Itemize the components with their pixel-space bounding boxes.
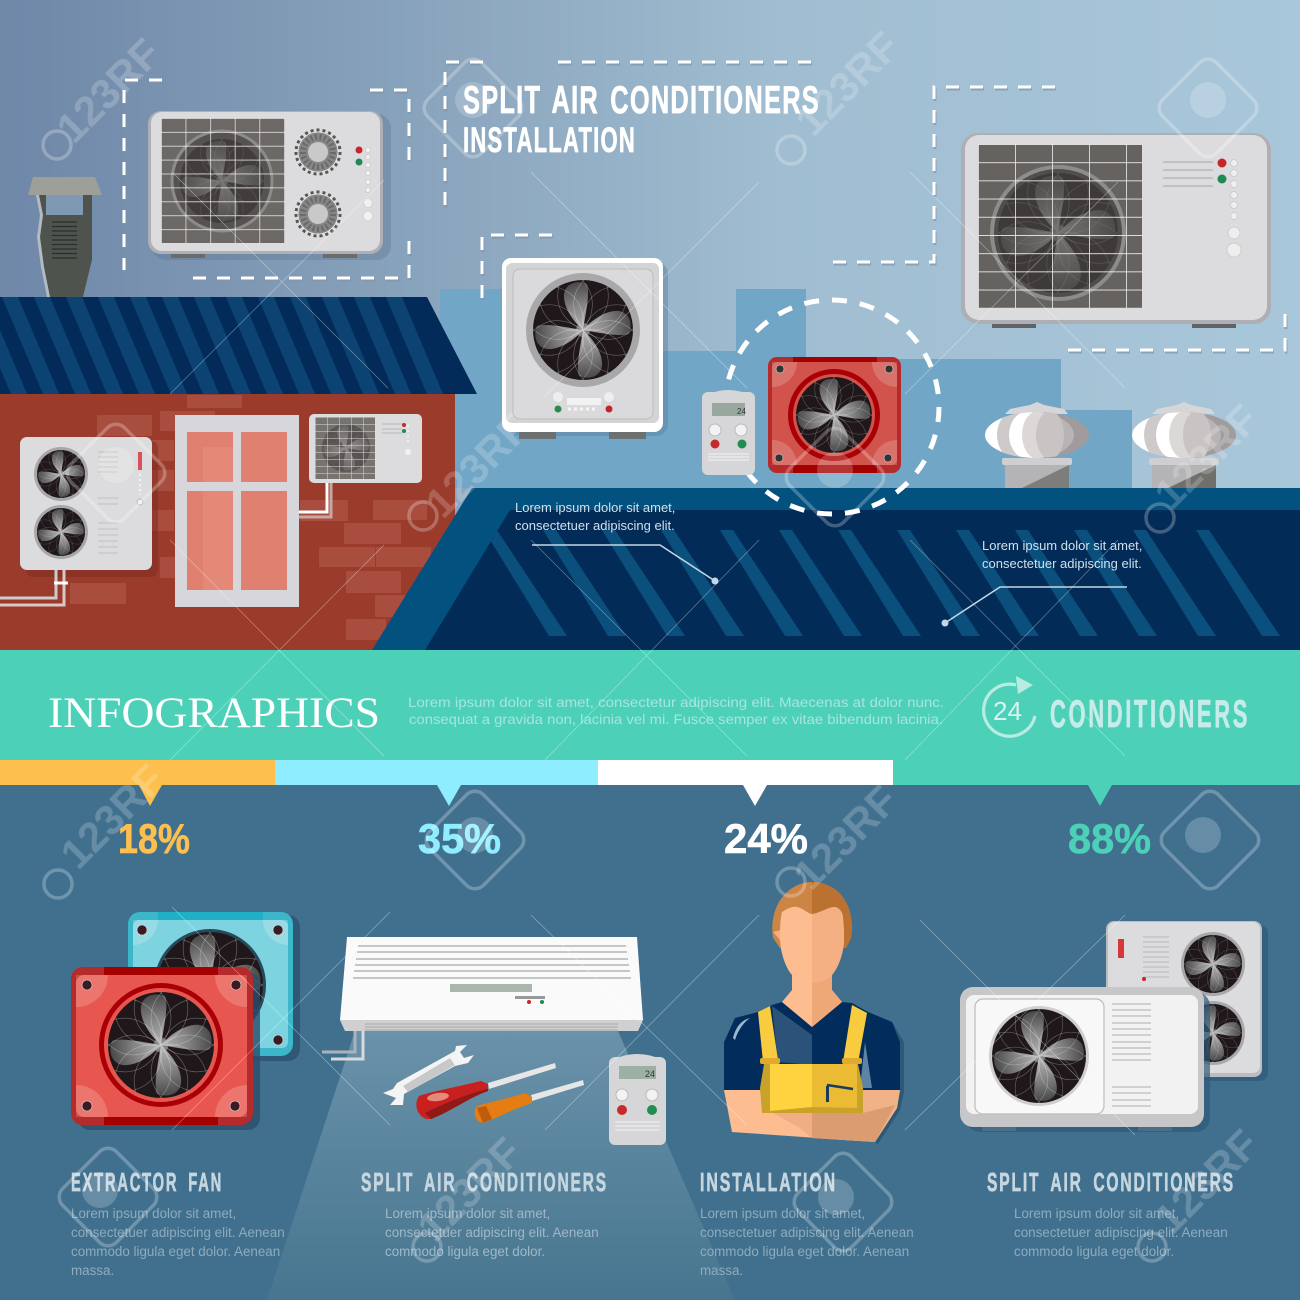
item text two: Lorem ipsum dolor sit amet, — [385, 1206, 550, 1221]
roof caption right — [942, 538, 1142, 626]
item text four: Lorem ipsum dolor sit amet, — [1014, 1206, 1179, 1221]
item text one: consectetuer adipiscing elit. Aenean — [71, 1225, 285, 1240]
light beam under air conditioner — [267, 1031, 735, 1300]
stock watermark overlay: 123RF — [51, 755, 174, 878]
stock watermark overlay: 123RF — [786, 22, 909, 145]
house wall with bricks — [0, 394, 455, 650]
extractor fan icons — [71, 912, 300, 1130]
item heading installation: INSTALLATION — [700, 1167, 837, 1197]
flat roof — [372, 488, 1300, 650]
house window — [175, 415, 331, 607]
title: INSTALLATION — [463, 121, 636, 160]
indoor split air conditioner — [322, 937, 643, 1059]
sky background — [0, 0, 1300, 650]
stock watermark overlay: 123RF — [416, 404, 539, 527]
infographics heading: INFOGRAPHICS — [48, 690, 380, 737]
percent 35: 35% — [418, 815, 501, 862]
remote control top: 24 — [737, 407, 746, 416]
item text three: consectetuer adipiscing elit. Aenean — [700, 1225, 914, 1240]
outdoor unit centre — [502, 258, 668, 439]
item text three: commodo ligula eget dolor. Aenean — [700, 1244, 909, 1259]
icon: 24 hour arrow: 24 — [993, 696, 1022, 726]
item text two: commodo ligula eget dolor. — [385, 1244, 545, 1259]
percent 88: 88% — [1068, 815, 1151, 862]
roof caption left: consectetuer adipiscing elit. — [515, 518, 675, 533]
item text four: consectetuer adipiscing elit. Aenean — [1014, 1225, 1228, 1240]
large outdoor unit — [961, 133, 1271, 328]
roof vent right — [1129, 402, 1236, 488]
roof caption right: consectetuer adipiscing elit. — [982, 556, 1142, 571]
dashed circle highlight — [725, 300, 939, 514]
item text three: massa. — [700, 1263, 743, 1278]
left wall unit — [0, 437, 158, 605]
installer worker — [724, 882, 904, 1144]
stock watermark overlay: 123RF — [408, 1128, 531, 1251]
remote control lower — [609, 1054, 666, 1145]
roof caption left: Lorem ipsum dolor sit amet, — [515, 500, 675, 515]
house roof — [0, 297, 477, 394]
roof caption left — [515, 500, 718, 584]
city skyline — [440, 289, 1132, 488]
percent 24: 24% — [724, 815, 808, 862]
item text three: Lorem ipsum dolor sit amet, — [700, 1206, 865, 1221]
dashed connector frames overlay — [124, 62, 1285, 350]
item heading extractor fan: EXTRACTOR FAN — [71, 1167, 223, 1197]
stock watermark overlay: 123RF — [1145, 1120, 1268, 1243]
stock watermark overlay: 123RF — [47, 29, 170, 152]
band description: Lorem ipsum dolor sit amet, consectetur adipiscing elit. Maecenas at dolor nunc. — [408, 695, 944, 710]
item text two: consectetuer adipiscing elit. Aenean — [385, 1225, 599, 1240]
chimney — [28, 177, 102, 297]
lower panel background — [0, 785, 1300, 1300]
roof vent left — [982, 402, 1089, 488]
item text one: massa. — [71, 1263, 114, 1278]
item text one: Lorem ipsum dolor sit amet, — [71, 1206, 236, 1221]
item heading split air conditioners: SPLIT AIR CONDITIONERS — [361, 1167, 608, 1197]
wrench — [383, 1045, 474, 1105]
wall air conditioner — [309, 414, 422, 483]
remote control lower: 24 — [645, 1069, 655, 1079]
stock watermark overlay: 123RF — [784, 776, 907, 899]
item text four: commodo ligula eget dolor. — [1014, 1244, 1174, 1259]
remote control top — [702, 390, 755, 475]
title — [463, 79, 820, 160]
band description: consequat a gravida non, lacinia vel mi. Fusce semper ex vitae bibendum lacinia. — [409, 712, 943, 727]
percent 18: 18% — [118, 815, 190, 862]
icon: 24 hour arrow — [984, 676, 1035, 736]
red extractor fan top — [768, 357, 901, 473]
screwdriver orange — [475, 1080, 584, 1123]
stock watermark overlay: 123RF — [1145, 395, 1268, 518]
outdoor units pair — [960, 921, 1268, 1132]
screwdriver red — [416, 1063, 556, 1119]
teal band — [0, 650, 1300, 785]
roof caption right: Lorem ipsum dolor sit amet, — [982, 538, 1142, 553]
outdoor unit top left — [148, 111, 391, 260]
progress bars — [0, 760, 1112, 806]
dashed connector frames — [125, 64, 1286, 352]
item text one: commodo ligula eget dolor. Aenean — [71, 1244, 280, 1259]
title: SPLIT AIR CONDITIONERS — [463, 79, 820, 122]
